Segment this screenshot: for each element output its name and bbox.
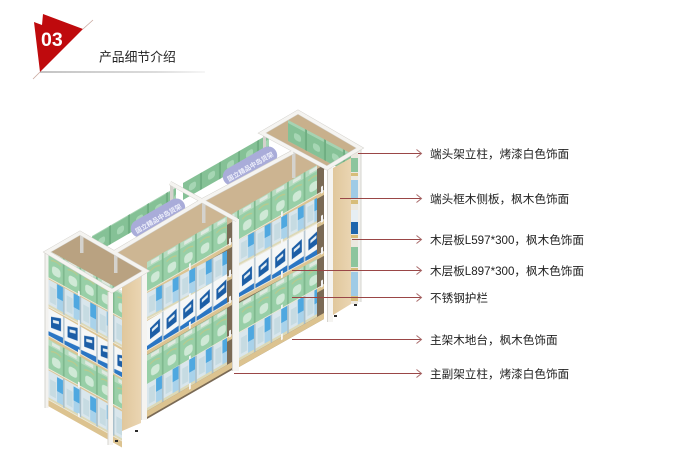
section header: 03 产品细节介绍: [33, 14, 205, 79]
left end row 2: white-blue boxes: [48, 279, 122, 352]
bay 2 row 2: white-blue boxes: [232, 194, 324, 274]
callout: wood base: [292, 333, 558, 347]
bay 1 row 4: green boxes: [147, 305, 232, 389]
left end row 3: dark blue boxes: [48, 308, 122, 382]
bay 1 row 3: dark blue boxes: [147, 271, 232, 355]
callout: end frame upright: 端头架立柱，烤漆白色饰面: [430, 147, 569, 161]
illustration: supermarket gondola shelves: [44, 112, 362, 447]
far end interior: [262, 112, 360, 168]
bay 1 row 1: green boxes: [147, 213, 232, 296]
callout: main upright: 主副架立柱，烤漆白色饰面: [430, 367, 569, 381]
callout: wood shelf L597: 木层板L597*300，枫木色饰面: [430, 233, 584, 247]
callout: end wood side panel: [340, 192, 569, 206]
left end row 4: green boxes: [48, 339, 122, 414]
back row of products bay 2: [183, 134, 269, 200]
red triangle badge: [33, 14, 93, 79]
callout: wood shelf L597: [352, 233, 584, 247]
sign: right header board: 国立精品中岛货架: [225, 149, 275, 183]
top wood back panel bay 2: [203, 152, 327, 220]
callout: stainless rail: 不锈钢护栏: [430, 291, 488, 305]
top wood back panel bay 1: [115, 200, 237, 271]
sign: right header board: [220, 143, 280, 189]
bay 2 row 1: green boxes: [232, 161, 324, 248]
section title: 产品细节介绍: [99, 50, 176, 64]
callout: end frame upright: [358, 147, 569, 161]
bay 1 row 2: white-blue boxes: [147, 248, 232, 324]
top frame bars: [47, 112, 360, 291]
far end back row of products: [288, 120, 354, 176]
back uprights: [80, 134, 296, 273]
sign: left header board: 国立精品中岛货架: [133, 201, 183, 235]
feet: [115, 304, 357, 442]
callout: end wood side panel: 端头框木侧板，枫木色饰面: [430, 192, 569, 206]
long face bay 1: [147, 213, 232, 419]
back row of products bay 1: [92, 187, 176, 255]
long face bay 2: [232, 161, 324, 371]
wood side panel: near end: [122, 273, 141, 431]
callout: wood shelf L897: 木层板L897*300，枫木色饰面: [430, 264, 584, 278]
left end interior: [47, 233, 146, 291]
section number: 03: [41, 29, 63, 51]
white steel uprights: [44, 149, 362, 445]
bay 2 row 4: green boxes: [232, 255, 324, 341]
wood side panel: far end: [333, 158, 351, 315]
header rule: [40, 71, 205, 73]
callout: main upright: [234, 367, 569, 381]
callout: wood base: 主架木地台，枫木色饰面: [430, 333, 558, 347]
left end row 5: white-blue boxes: [48, 370, 122, 447]
bay 2 row 3: dark blue boxes: [232, 220, 324, 306]
bay 2 row 5: white-blue boxes and wood base: [232, 285, 324, 371]
sign: left header board: [128, 195, 188, 241]
left end row 1: green boxes: [48, 250, 122, 322]
bay 1 row 5: white-blue boxes and wood base: [147, 335, 232, 417]
callout: stainless rail: [292, 291, 488, 305]
callout: wood shelf L897: [292, 264, 584, 278]
far end product slices: [351, 152, 358, 304]
left end face of shelves: [48, 250, 122, 447]
